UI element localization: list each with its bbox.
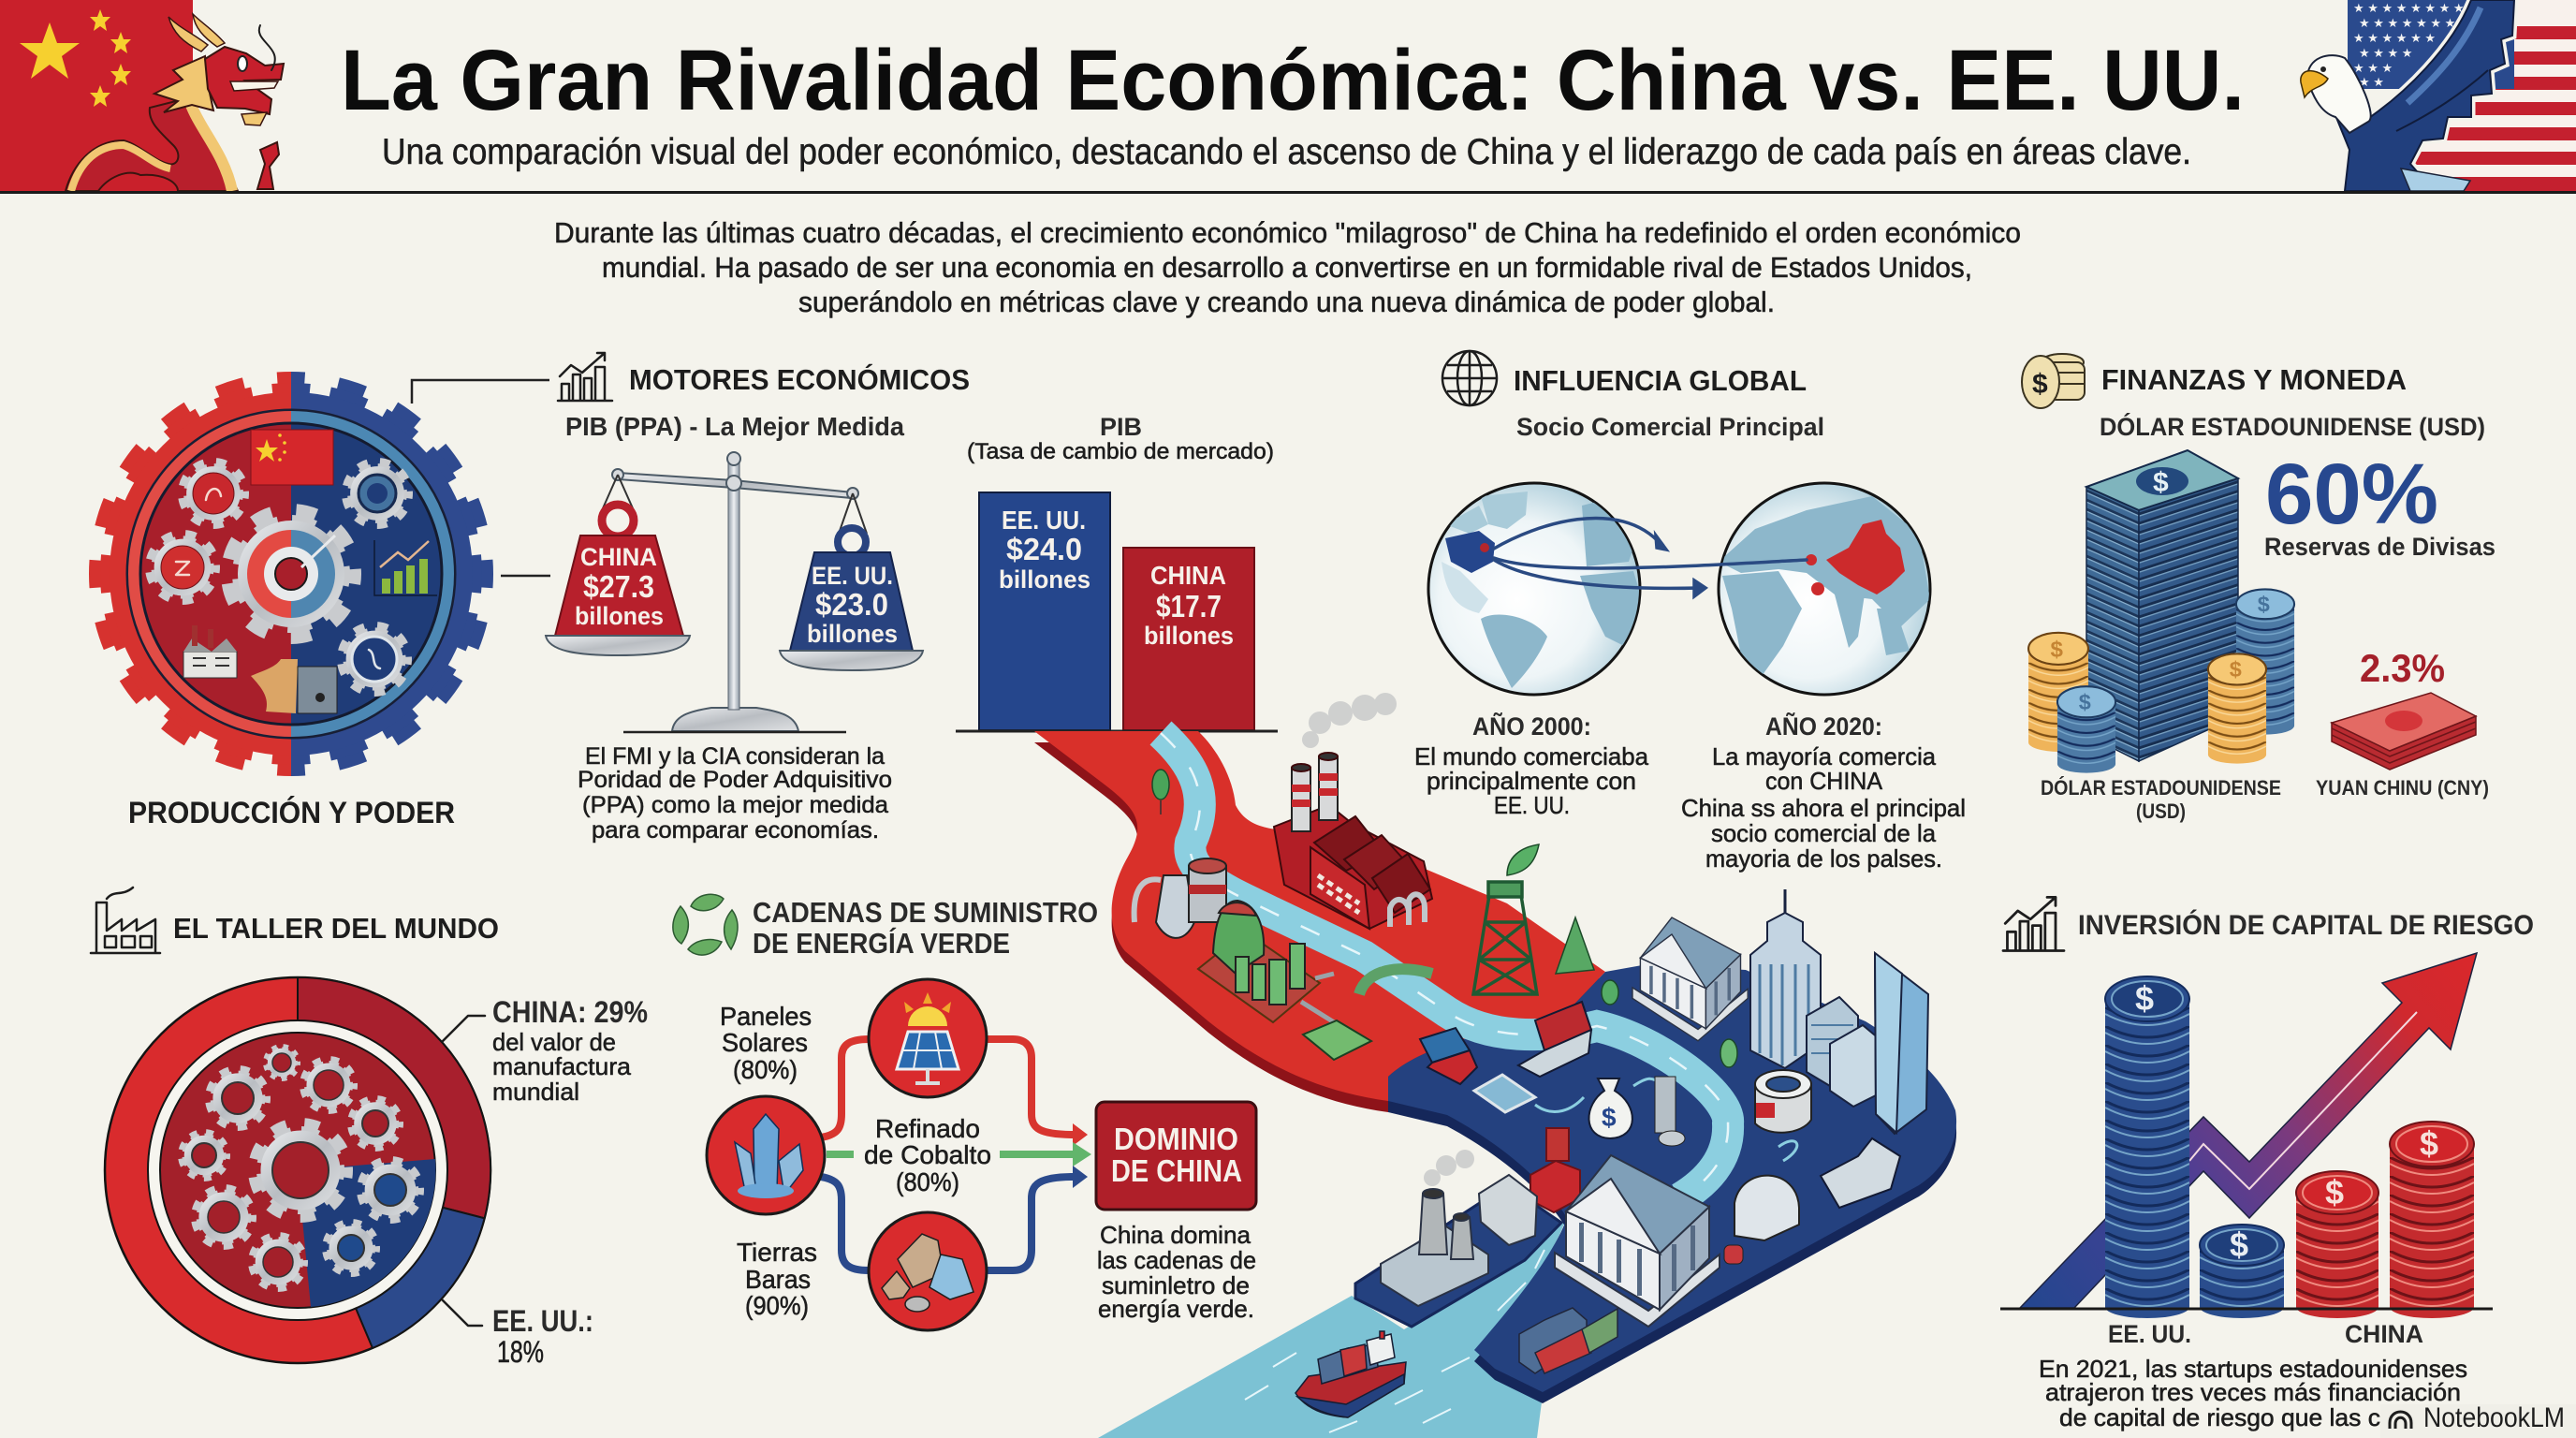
label: EE. UU. 18%: EE. UU.: (492, 1304, 593, 1338)
coin stack: China medium (2296, 1171, 2378, 1318)
US flag with eagle: ★ ★ ★ (2353, 61, 2393, 75)
money bag (1588, 1078, 1632, 1138)
bar heading: PIB (1100, 413, 1142, 441)
subtitle: Una comparación visual del poder económico, destacando el ascenso de China y el liderazgo de cada país en áreas clave. (382, 132, 2191, 172)
weight: EE. UU.: billones (807, 620, 898, 648)
weight: China: billones (575, 602, 664, 630)
subheading: Socio Comercial Principal (1516, 413, 1824, 441)
coin stack: EE. UU. small (2200, 1225, 2284, 1318)
caption 2000: AÑO 2000: (1472, 712, 1591, 741)
China flag with dragon (0, 0, 284, 191)
heading: EL TALLER DEL MUNDO (173, 912, 499, 945)
red block (1530, 1128, 1580, 1212)
coin stack: China medium: $ (2325, 1173, 2344, 1211)
factory icon (183, 625, 237, 678)
caption 2000: EE. UU. (1494, 791, 1570, 819)
label: EE. UU. 18%: 18% (497, 1335, 544, 1369)
coin stacks: $ (2050, 637, 2063, 662)
caption 2020: AÑO 2020: (1765, 712, 1882, 741)
weight: China: CHINA (580, 543, 657, 571)
stack of dollars: $ (2153, 467, 2169, 498)
dominio de china box (1096, 1102, 1256, 1210)
panel: motores económicos (546, 353, 970, 844)
green plate (1303, 1020, 1371, 1060)
circle: solar panel (869, 979, 987, 1097)
coin stacks: $ (2230, 657, 2242, 682)
big split gear (96, 379, 486, 769)
icon: coins (2022, 354, 2085, 408)
intro paragraph: superándolo en métricas clave y creando una nueva dinámica de poder global. (798, 286, 1775, 318)
coin stack: EE. UU. tall (2105, 976, 2189, 1318)
coin stacks (2028, 589, 2294, 773)
stat: 60% (2264, 447, 2496, 561)
label: China 29%: del valor de (492, 1028, 616, 1056)
weight: EE. UU.: EE. UU. (812, 562, 893, 590)
note (1097, 1221, 1256, 1323)
dominio de china box: DOMINIO (1114, 1122, 1238, 1156)
weight: China: $27.3 (583, 569, 654, 604)
money bag: $ (1602, 1103, 1617, 1132)
bar: China: billones (1144, 622, 1234, 650)
panel: PIB tasa de cambio (956, 413, 1278, 731)
central gear (228, 511, 354, 637)
subheading: PIB (PPA) - La Mejor Medida (565, 412, 904, 441)
panel: producción y poder gear (96, 379, 550, 829)
NotebookLM watermark (2380, 1402, 2576, 1438)
stack of dollars (2086, 450, 2238, 761)
small gears (149, 462, 409, 693)
labels: Paneles (720, 1002, 812, 1031)
note: (PPA) como la mejor medida (582, 792, 888, 818)
factory island (1355, 1185, 1561, 1327)
note: las cadenas de (1097, 1246, 1256, 1274)
note: En 2021, las startups estadounidenses (2039, 1355, 2467, 1383)
coin stacks: $ (2258, 593, 2270, 617)
US flag with eagle: ★ ★ ★ ★ ★ ★ ★ ★ ★ (2353, 1, 2479, 15)
blue land band (1388, 964, 1956, 1403)
panel: finanzas y moneda (2022, 354, 2496, 823)
red land band (1034, 731, 1605, 1112)
lower bank (1555, 1155, 1720, 1327)
trees and leaf (1152, 770, 1737, 1067)
note (578, 743, 892, 844)
labels: Baras (745, 1265, 811, 1294)
caption 2020: socio comercial de la (1711, 819, 1937, 847)
note (2039, 1355, 2467, 1431)
red barrel (1724, 1245, 1743, 1264)
subheading: DÓLAR ESTADOUNIDENSE (USD) (2100, 412, 2485, 441)
heading: FINANZAS Y MONEDA (2101, 363, 2407, 396)
oil derrick (1473, 882, 1537, 994)
donut chart (105, 977, 490, 1363)
growth icon (374, 540, 437, 595)
coin stack: China tall: $ (2420, 1124, 2438, 1163)
mini flag (251, 430, 333, 485)
yuan bills (2332, 693, 2476, 770)
US flag with eagle: ★ ★ ★ ★ (2359, 46, 2412, 60)
water ripples (1245, 1250, 1544, 1432)
label: China 29%: mundial (492, 1078, 579, 1106)
heading (753, 896, 1098, 960)
coin stack: EE. UU. tall: $ (2135, 979, 2154, 1018)
weight: China (546, 505, 690, 655)
caption 2020: China ss ahora el principal (1681, 794, 1966, 822)
bar: China: $17.7 (1156, 589, 1222, 624)
caption 2020: con CHINA (1765, 767, 1883, 795)
stat: 2.3%: 2.3% (2360, 646, 2445, 690)
skyscrapers (1750, 889, 1928, 1134)
axis labels: CHINA (2345, 1320, 2423, 1348)
note: El FMI y la CIA consideran la (585, 743, 885, 770)
caption 2000: El mundo comerciaba (1414, 742, 1649, 770)
lower river (1098, 1221, 1565, 1438)
upper river (1161, 733, 1728, 1198)
circle: rocks (869, 1212, 987, 1330)
caption 2020 (1681, 712, 1966, 873)
bar: China (1123, 548, 1254, 730)
icon: chart (2003, 897, 2064, 950)
heading: CADENAS DE SUMINISTRO (753, 896, 1098, 929)
intro paragraph: mundial. Ha pasado de ser una economia en desarrollo a convertirse en un formidable rival de Estados Unidos, (602, 251, 1972, 284)
coin stacks: $ (2079, 690, 2091, 714)
labels: de Cobalto (864, 1140, 991, 1169)
US flag with eagle: ★ ★ (2359, 75, 2384, 89)
heading: INVERSIÓN DE CAPITAL DE RIESGO (2078, 909, 2534, 941)
bar: China: CHINA (1150, 561, 1226, 590)
note: de capital de riesgo que las c (2059, 1403, 2380, 1431)
labels: (90%) (745, 1291, 809, 1320)
label: China 29%: CHINA: 29% (492, 995, 648, 1029)
icon: coins: $ (2032, 369, 2048, 400)
bar: EE. UU.: $24.0 (1006, 532, 1082, 566)
labels: (80%) (733, 1055, 798, 1084)
zigzag arrow (2020, 953, 2477, 1308)
currency labels: (USD) (2136, 800, 2186, 823)
note: Poridad de Poder Adquisitivo (578, 767, 892, 793)
small device and pipes (1474, 1075, 1797, 1161)
icon: globe (1442, 351, 1497, 405)
currency labels (2041, 776, 2489, 823)
panel: influencia global (1414, 351, 1966, 873)
intro paragraph (554, 216, 2021, 318)
cargo ship (1295, 1331, 1406, 1417)
heading: DE ENERGÍA VERDE (753, 927, 1010, 960)
label: produccion y poder: PRODUCCIÓN Y PODER (128, 796, 455, 829)
title: La Gran Rivalidad Económica: China vs. EE. UU. (341, 33, 2245, 128)
mixed industry icon (251, 659, 337, 713)
stat: 60%: 60% (2265, 447, 2438, 542)
header (0, 0, 2576, 194)
globe 2020 (1719, 483, 1930, 695)
containers (1519, 1308, 1617, 1373)
US flag with eagle (2301, 0, 2576, 191)
trucks (1420, 1002, 1900, 1208)
US flag with eagle: ★ ★ ★ ★ ★ ★ ★ ★ (2359, 16, 2470, 30)
upper bank (1632, 917, 1748, 1041)
bar heading (967, 413, 1274, 464)
dominio de china box: DE CHINA (1111, 1153, 1242, 1188)
refinery tanks (1134, 858, 1339, 1025)
trade arrows (1494, 518, 1807, 596)
heading: MOTORES ECONÓMICOS (629, 362, 970, 396)
heading: INFLUENCIA GLOBAL (1514, 364, 1807, 397)
labels: Tierras (737, 1238, 817, 1267)
currency labels: DÓLAR ESTADOUNIDENSE (2041, 776, 2281, 800)
header rule (0, 191, 2576, 194)
panel: el taller del mundo (91, 888, 648, 1369)
note: suminletro de (1102, 1271, 1250, 1299)
label: EE. UU. 18% (492, 1304, 593, 1369)
labels (720, 1002, 991, 1320)
intro paragraph: Durante las últimas cuatro décadas, el crecimiento económico "milagroso" de China ha redefinido el orden económico (554, 216, 2021, 249)
labels: (80%) (896, 1167, 959, 1196)
dome (1734, 1176, 1799, 1240)
weight: EE. UU.: $23.0 (815, 587, 888, 622)
icon: factory (91, 888, 160, 953)
balance scale (599, 452, 867, 732)
icon: chart (558, 353, 612, 401)
stat: 60%: Reservas de Divisas (2264, 533, 2496, 561)
axis labels: EE. UU. (2108, 1320, 2191, 1348)
labels: Solares (722, 1028, 808, 1057)
factory (1274, 753, 1432, 929)
bar heading: (Tasa de cambio de mercado) (967, 439, 1274, 464)
note: energía verde. (1098, 1295, 1254, 1323)
icon: leaf cycle (673, 894, 738, 955)
note: atrajeron tres veces más financiación (2045, 1378, 2461, 1406)
gears in donut (181, 1046, 420, 1289)
arch pipe (1359, 969, 1432, 994)
axis labels (2108, 1320, 2423, 1348)
coin stack: EE. UU. small: $ (2230, 1225, 2248, 1264)
note: para comparar economías. (592, 817, 879, 844)
ring tank (1755, 1070, 1811, 1133)
circle: crystals (707, 1096, 825, 1214)
weight: EE. UU. (780, 528, 923, 670)
bar: EE. UU.: EE. UU. (1002, 506, 1086, 535)
smoke (1302, 693, 1397, 748)
coin stack: China tall (2390, 1122, 2474, 1318)
panel: cadenas de suministro (673, 894, 1256, 1330)
leaders (443, 1016, 485, 1326)
column pieces (1655, 1077, 1685, 1146)
connector lines (412, 380, 550, 576)
label: China 29%: manufactura (492, 1052, 632, 1080)
currency labels: YUAN CHINU (CNY) (2316, 776, 2489, 800)
caption 2020: La mayoría comercia (1712, 742, 1937, 770)
caption 2000 (1414, 712, 1649, 819)
note: China domina (1100, 1221, 1251, 1249)
bar: EE. UU.: billones (999, 565, 1090, 594)
panel: inversión de capital de riesgo (2000, 897, 2534, 1431)
caption 2020: mayoria de los palses. (1705, 844, 1942, 873)
labels: Refinado (875, 1114, 980, 1143)
flow arrows (821, 1039, 1075, 1270)
central isometric river landscape (1034, 693, 1956, 1438)
US flag with eagle: ★ ★ ★ ★ ★ ★ (2353, 31, 2436, 45)
globe 2000 (1428, 483, 1647, 695)
island factory (1381, 1150, 1537, 1306)
caption 2000: principalmente con (1427, 767, 1636, 795)
label: China 29% (492, 995, 648, 1106)
bar: EE. UU. (979, 492, 1110, 730)
